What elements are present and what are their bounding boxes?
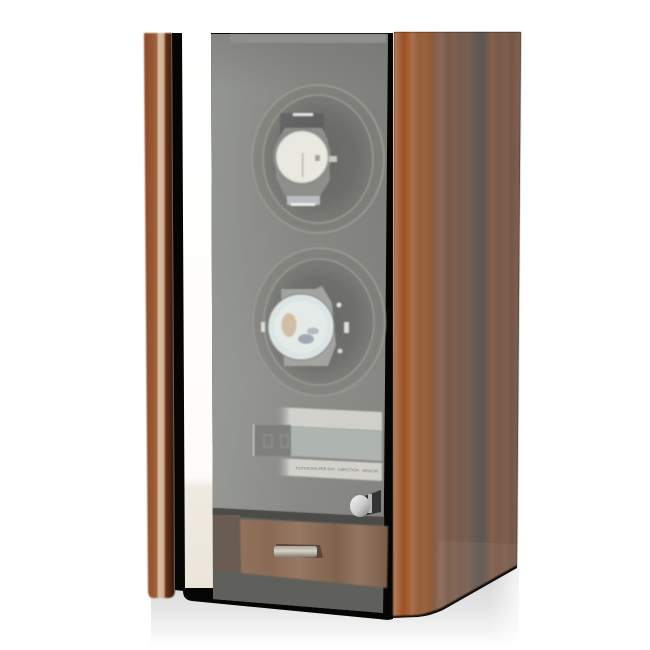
lower silver strip with labels: ROTATIONS PER DAY <box>296 467 336 472</box>
watch 2 <box>261 286 349 366</box>
drawer front <box>240 519 388 588</box>
glass door <box>211 34 388 613</box>
floor shadow <box>151 565 519 650</box>
right wood side panel <box>393 32 521 618</box>
drawer shadow band <box>213 515 240 573</box>
upper silver strip <box>275 407 382 431</box>
left wood side panel <box>144 33 175 598</box>
lower silver strip with labels: DIRECTION <box>338 468 359 473</box>
top reflection <box>230 34 386 43</box>
winder 1 <box>252 85 384 233</box>
gloss reflection <box>436 541 517 610</box>
door knob <box>350 490 381 517</box>
lower silver strip with labels: SENSOR <box>362 469 378 473</box>
digital display <box>253 424 382 461</box>
control panel <box>253 407 382 481</box>
watch 1 <box>273 113 337 206</box>
white front strip <box>182 33 213 588</box>
drawer section <box>213 508 388 613</box>
drawer pull <box>274 544 323 558</box>
lower silver strip with labels <box>275 458 382 481</box>
winder 2 <box>253 248 385 396</box>
black cabinet frame <box>172 33 393 620</box>
